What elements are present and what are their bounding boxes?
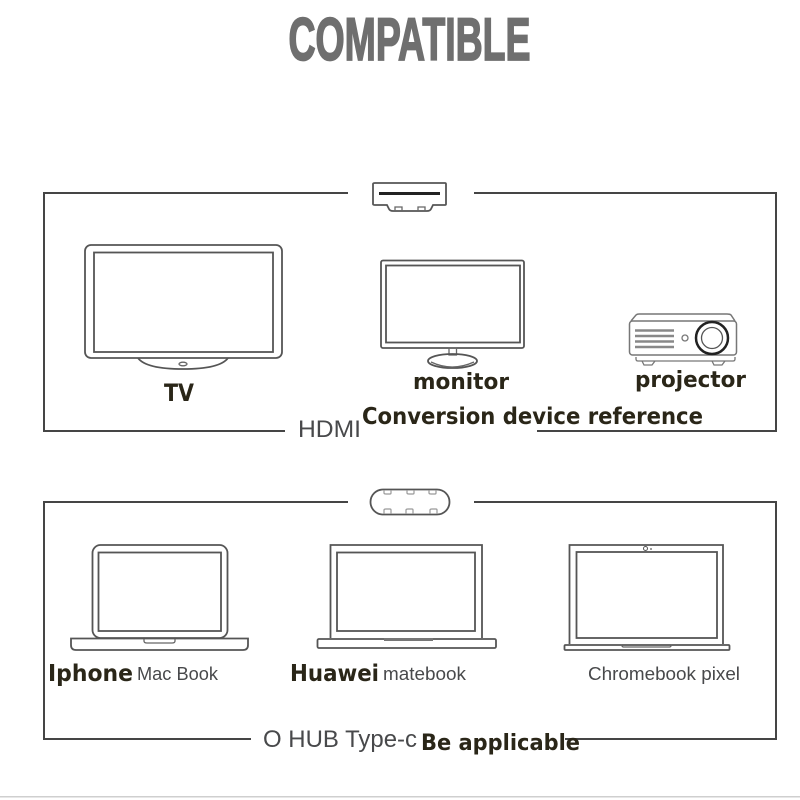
title: COMPATIBLE — [288, 6, 530, 73]
icon: TV — [85, 245, 282, 369]
icon: MacBook — [71, 545, 248, 650]
label: Chromebook pixel: Chromebook pixel — [588, 664, 740, 684]
icon: Huawei matebook — [318, 545, 496, 648]
label: Mac Book: Mac Book — [137, 664, 219, 684]
label: Iphone: Iphone — [48, 661, 133, 687]
label: HDMI: HDMI — [298, 416, 361, 443]
panel: HDMI devices — [44, 183, 776, 443]
icon: USB-C port — [370, 490, 450, 514]
label: monitor: monitor — [413, 370, 509, 395]
label: projector: projector — [635, 368, 746, 393]
heading: conversion device reference: Conversion device reference — [362, 404, 703, 430]
label: matebook: matebook — [383, 664, 467, 684]
icon: projector — [630, 314, 736, 365]
label: TV: TV — [164, 379, 194, 407]
label: O HUB Type-c: O HUB Type-c — [263, 726, 417, 753]
icon: HDMI port — [373, 183, 446, 211]
icon: monitor — [381, 260, 524, 368]
panel: USB-C devices — [44, 490, 776, 756]
icon: Chromebook pixel — [564, 545, 730, 650]
heading: be applicable: Be applicable — [421, 731, 580, 756]
label: Huawei: Huawei — [290, 661, 379, 687]
